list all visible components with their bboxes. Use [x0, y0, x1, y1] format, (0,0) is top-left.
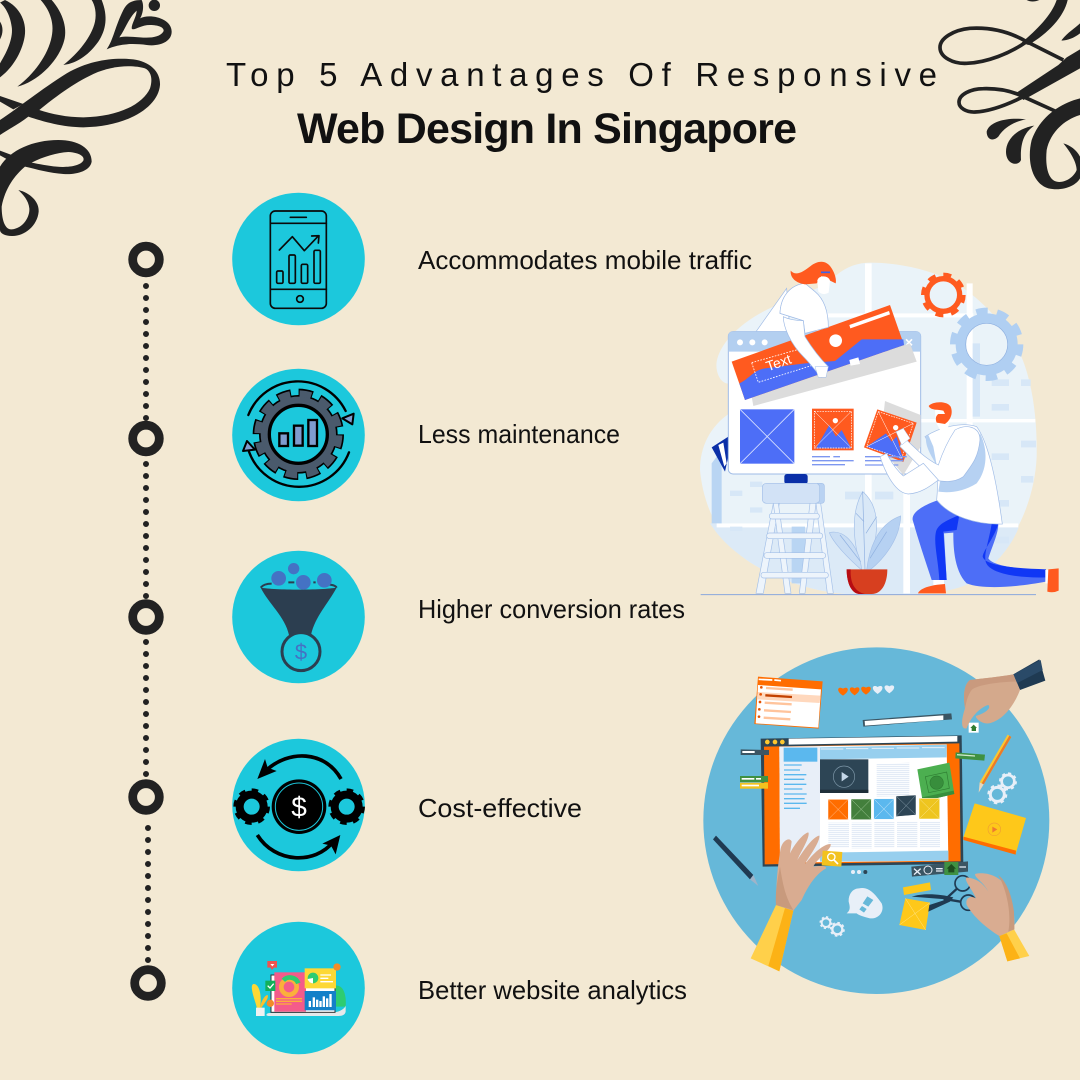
man's shoes [933, 570, 1049, 585]
banner card [732, 305, 904, 400]
blue circle background [703, 647, 1049, 994]
search bar [863, 713, 952, 727]
backdrop blob [700, 263, 1037, 594]
wireframe tile: tilted [864, 409, 917, 465]
timeline [133, 246, 161, 996]
icon: conversion funnel [232, 551, 365, 683]
home tile and top hand [962, 659, 1045, 733]
rating hearts [838, 685, 894, 696]
banner card: Text [764, 351, 793, 374]
tilted tile shadow [880, 401, 921, 475]
icon: analytics dashboard [232, 922, 365, 1054]
banner shadow [752, 343, 917, 406]
speech bubble [847, 888, 883, 918]
pencil [979, 735, 1011, 793]
timeline dots [146, 286, 148, 964]
green camera note [917, 763, 954, 801]
dropdown menu [754, 677, 823, 729]
left hand with magnifier [751, 832, 842, 971]
label 1: Accommodates mobile traffic [418, 245, 752, 275]
icon: phone with chart [232, 193, 365, 325]
floor line [701, 593, 1036, 596]
orange gear [925, 276, 962, 314]
sticky notes [899, 882, 931, 930]
stool [756, 474, 833, 593]
pagination dots [851, 870, 867, 874]
label 2: Less maintenance [418, 419, 620, 449]
man kneeling [880, 402, 1059, 593]
yellow video card [963, 803, 1026, 855]
icon: coin between gears [232, 739, 365, 871]
left floating tabs [740, 749, 769, 789]
list labels [418, 245, 752, 1005]
browser window [728, 332, 921, 474]
illustration: team building responsive layout [700, 262, 1059, 595]
title [226, 56, 937, 153]
toolbar buttons [911, 861, 968, 877]
man's head [935, 409, 949, 430]
gallery tiles [828, 795, 940, 820]
icon: conversion funnel: $ [295, 639, 307, 664]
gallery captions [828, 821, 940, 848]
video player [820, 759, 868, 793]
scissors [912, 876, 976, 912]
icon: coin between gears: $ [291, 792, 307, 823]
label 3: Higher conversion rates [418, 594, 685, 624]
dark pen [713, 836, 758, 886]
browser frame [761, 735, 963, 867]
man's shirt [925, 425, 1002, 524]
title line 1: Top 5 Advantages Of Responsive [226, 56, 937, 93]
label 4: Cost-effective [418, 793, 582, 823]
right hand with sleeve [966, 873, 1029, 961]
timeline rings [133, 246, 161, 996]
icon: gear with bars [232, 369, 365, 501]
label 5: Better website analytics [418, 975, 687, 1005]
woman's torso behind window [756, 283, 828, 332]
illustration: designers assembling web page [703, 647, 1049, 994]
man's arms [900, 427, 980, 481]
wireframe tile: blue [740, 409, 794, 464]
wireframe tile: orange [812, 409, 854, 465]
small gears right [988, 773, 1016, 803]
woman's leg behind window [712, 437, 728, 472]
man's trousers [913, 501, 1046, 587]
title line 2: Web Design In Singapore [297, 105, 797, 153]
woman's hair and head [791, 262, 836, 294]
woman's upper body, arm and hand [780, 283, 860, 377]
ornament: top-left flourish [0, 0, 172, 236]
green tag [955, 752, 985, 761]
ornament: top-right flourish [940, 0, 1080, 189]
small gears bottom [820, 917, 844, 936]
text block [877, 763, 909, 797]
potted plant [829, 492, 901, 594]
blue gear [955, 313, 1018, 376]
